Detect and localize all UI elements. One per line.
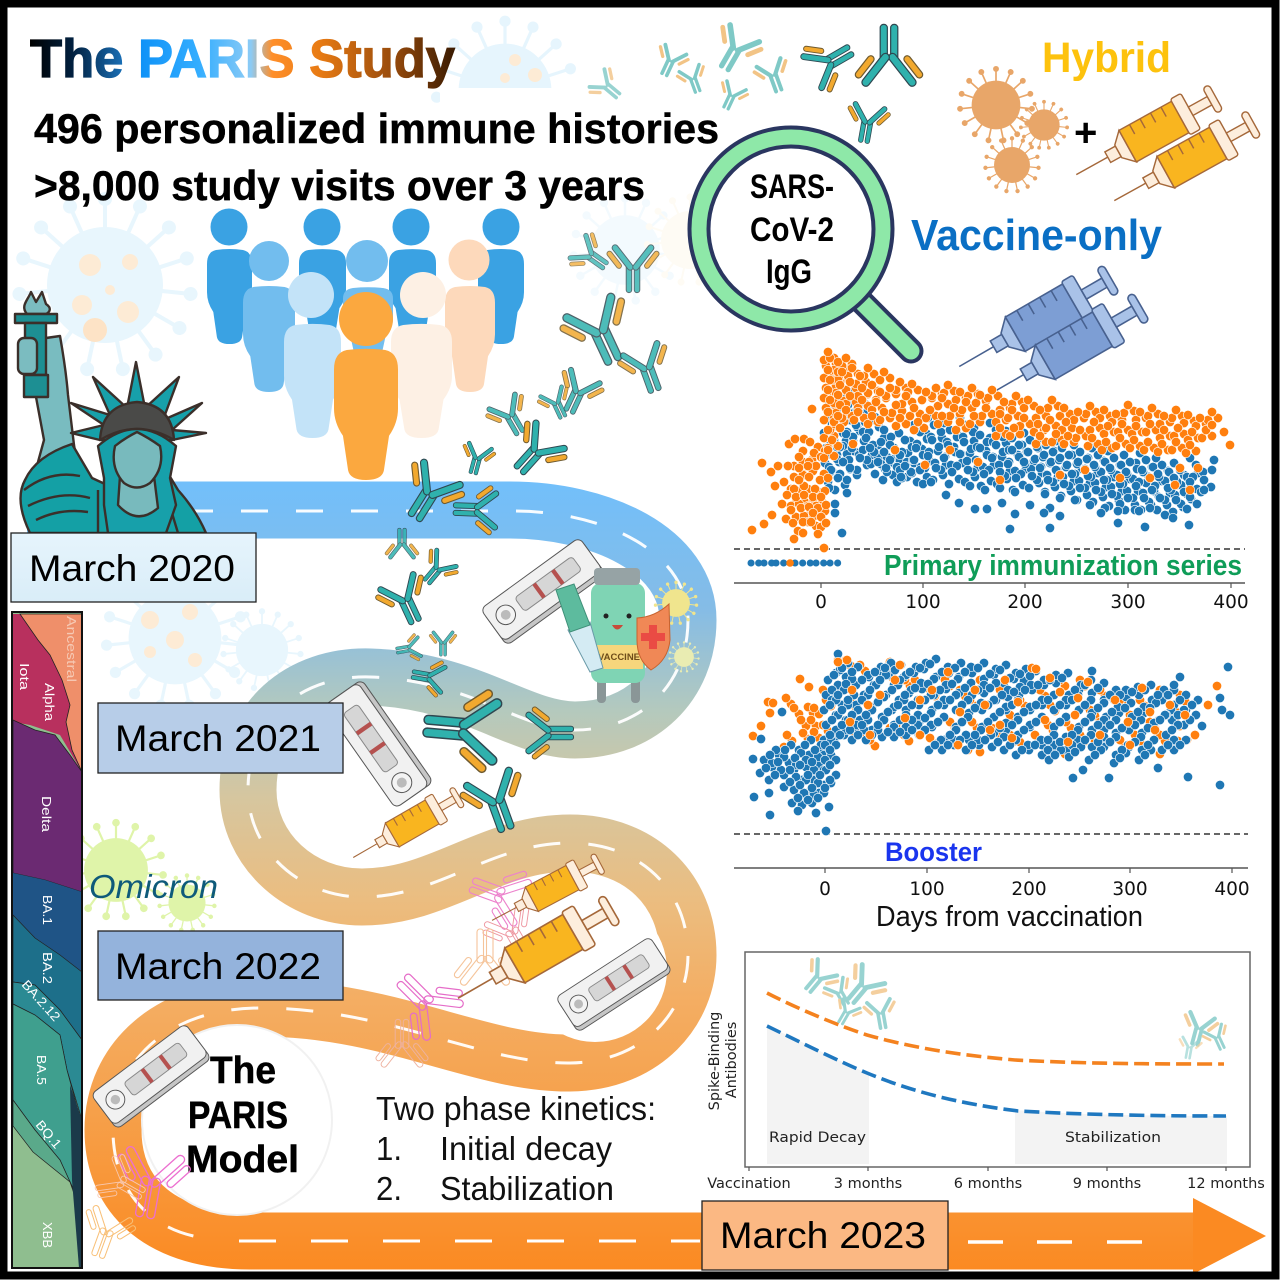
stream labels: XBB [40,1222,55,1248]
orange points [752,352,1230,548]
pale antibodies at lower road [72,1143,194,1266]
icon: vaccine-only syringes [948,259,1153,414]
antibodies: stream from crowd to road [371,228,681,842]
variant stream chart [11,612,82,1268]
text: two phase kinetics: Two phase kinetics: [376,1090,656,1127]
title: The PARIS Study [30,29,455,89]
text: two phase kinetics: 2. [376,1170,402,1207]
people group icon [207,208,524,480]
stream labels: Iota [17,663,32,691]
icon: hybrid syringes [1066,79,1264,218]
label: Hybrid: Hybrid [1042,34,1171,82]
label: Omicron: Omicron [89,868,218,905]
axis labels: Vaccination [707,1176,791,1192]
axis labels: Spike-Binding [707,1012,723,1110]
virus: Omicron [65,819,217,933]
icon: Statue of Liberty [15,292,206,533]
icon: infection viruses [957,66,1069,194]
phase labels: Rapid Decay [769,1130,866,1146]
axis tick labels: 200 [1011,879,1047,900]
plus sign: + [1074,111,1097,155]
text: two phase kinetics: Stabilization [440,1170,614,1207]
label: March 2023 [702,1201,948,1270]
axis tick labels: 0 [819,879,831,900]
orange points mixed over blue [838,660,1195,745]
antibodies: cluster above magnifier [584,17,924,147]
axis tick labels: 300 [1112,879,1148,900]
stream labels: BA.5 [34,1055,49,1085]
stream labels: BA.2.12 [19,977,63,1024]
scatter chart: booster [734,654,1250,900]
headline: study visits: >8,000 study visits over 3 years [34,162,645,209]
icon: test strip on road [556,937,672,1032]
label: Vaccine-only: Vaccine-only [911,211,1162,260]
line chart: two phase decay: Stabilization [1065,1130,1161,1146]
stream labels: Ancestral [64,616,79,682]
line chart: two phase decay [707,952,1265,1192]
x axis title: Days from vaccination [876,901,1143,933]
label: March 2020 [11,533,256,602]
road: winding timeline [27,510,1266,1274]
icon: test strip near March 2021 [324,679,433,808]
axis labels: 9 months [1073,1176,1141,1192]
blue points [824,391,1214,533]
stream labels: BA.2 [40,952,55,984]
label: March 2021: March 2021 [115,718,321,759]
axis tick labels [819,879,1250,900]
text: The PARIS Model [186,1050,299,1181]
text: two phase kinetics [376,1090,656,1207]
label: booster: Booster [885,837,982,867]
small pre-vaccine points [751,560,838,566]
text: SARS-CoV-2 IgG [750,168,834,291]
axis labels [707,1012,1265,1192]
label: March 2022: March 2022 [115,946,321,987]
icon: vaccine mascot [556,568,700,703]
text: two phase kinetics: 1. [376,1130,402,1167]
axis labels: Antibodies [724,1022,740,1098]
text: The PARIS Model: Model [186,1139,299,1181]
axis labels: 3 months [834,1176,902,1192]
scatter chart: primary immunization series [734,352,1249,613]
icon: magnifying glass [699,137,911,351]
axis tick labels: 100 [909,879,945,900]
axis tick labels: 300 [1110,592,1146,613]
orange points [753,660,1217,774]
stream labels: BQ.1 [33,1117,65,1151]
label: March 2020: March 2020 [29,548,235,589]
axis labels: 6 months [954,1176,1022,1192]
label: March 2023: March 2023 [720,1215,926,1256]
blue points [753,654,1230,831]
icon: test strip at PARIS Model [91,1023,211,1129]
hybrid curve [767,993,1224,1064]
vaccine-only curve [767,1026,1226,1116]
headline: immune histories: 496 personalized immune histories [34,105,719,152]
text: SARS-CoV-2 IgG: SARS- [750,168,834,206]
stream labels: Delta [39,796,54,833]
stream labels: Alpha [42,683,57,722]
axis tick labels: 0 [815,592,827,613]
axis tick labels [815,592,1249,613]
text: The PARIS Model: PARIS [188,1095,288,1137]
icon: test strip with vaccine mascot [480,537,606,646]
axis tick labels: 400 [1214,879,1250,900]
text: two phase kinetics: Initial decay [440,1130,612,1167]
label: March 2022 [98,931,343,1000]
icon: vaccine mascot: VACCINE [598,652,640,662]
label: March 2021 [98,703,343,773]
axis tick labels: 400 [1213,592,1249,613]
white disc behind roadside test strip [523,898,667,1042]
white circle: PARIS Model [142,1025,332,1215]
text: SARS-CoV-2 IgG: CoV-2 [750,211,834,249]
stream labels [17,616,79,1248]
axis tick labels: 200 [1007,592,1043,613]
text: SARS-CoV-2 IgG: IgG [766,253,812,291]
icon: roadside syringes and pale antibodies [345,783,624,1068]
label: primary immunization series: Primary immunization series [884,550,1242,582]
text: The PARIS Model: The [210,1050,276,1092]
shaded phase areas [767,1026,1227,1164]
stream labels: BA.1 [40,895,55,925]
background: faded virus particles [12,16,737,712]
axis labels: 12 months [1187,1176,1265,1192]
antibodies over curve [792,953,1236,1061]
axis tick labels: 100 [905,592,941,613]
